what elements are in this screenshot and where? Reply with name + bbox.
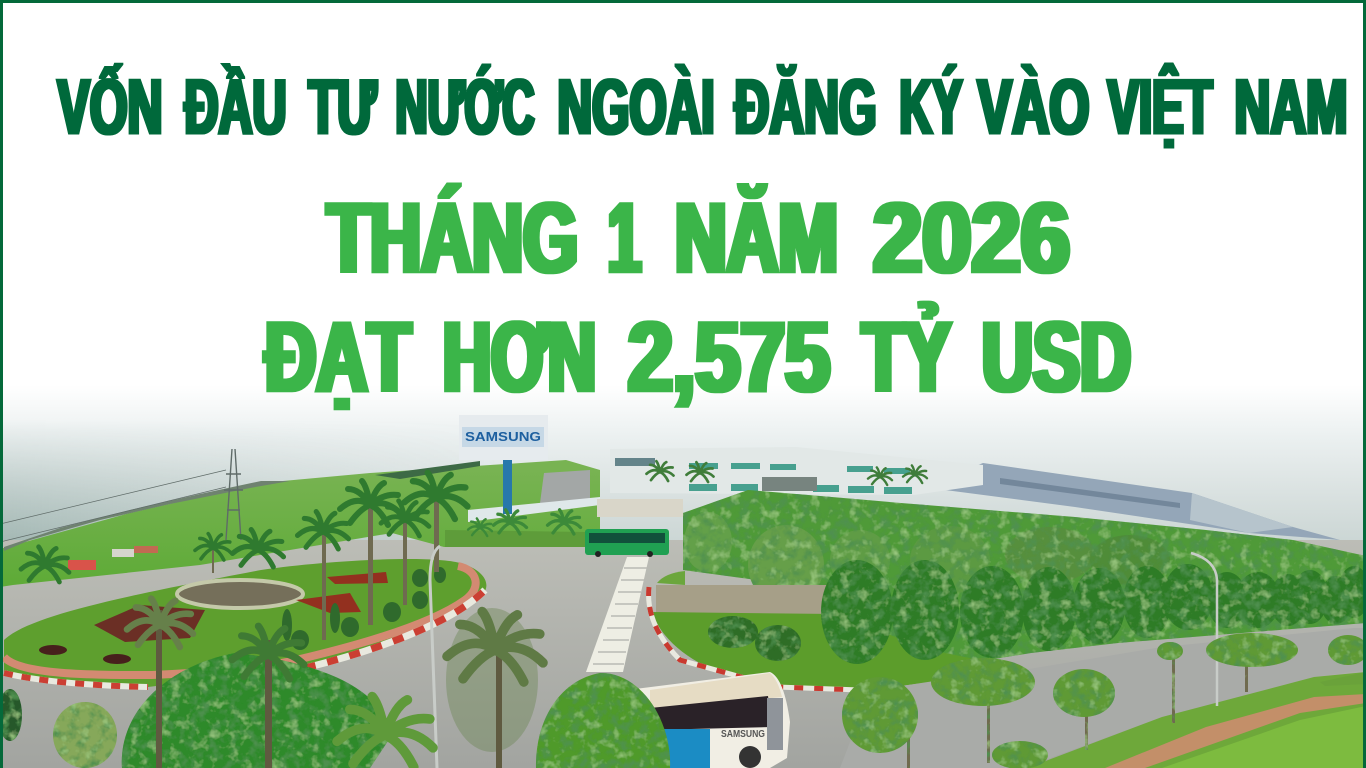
right road and verge xyxy=(840,628,1366,768)
white Samsung bus xyxy=(572,672,790,768)
billboard: Samsung xyxy=(459,415,548,514)
headline: month and amount: USD xyxy=(982,301,1131,412)
photo: industrial park panorama xyxy=(0,385,1366,768)
title line 1: VÀO xyxy=(978,62,1090,150)
headline: month and amount: 2026 xyxy=(873,182,1070,293)
inner estate road and fence xyxy=(445,470,683,547)
foreground trees left xyxy=(0,653,392,768)
title line 1: NƯỚC xyxy=(396,62,534,150)
curb: right xyxy=(649,587,860,690)
flags row xyxy=(68,546,158,570)
left sky shadow xyxy=(3,436,402,540)
title line 1 xyxy=(58,62,1348,150)
small palms behind building xyxy=(646,461,927,485)
green bus xyxy=(585,529,669,557)
title line 1: NGOÀI xyxy=(558,62,714,150)
row of dark trees xyxy=(821,560,1366,664)
fence palms xyxy=(468,510,580,536)
title line 1: VỐN xyxy=(58,62,162,150)
title line 1: VIỆT xyxy=(1108,62,1212,150)
white Samsung bus: SAMSUNG xyxy=(721,729,765,740)
foreground tree over bus xyxy=(536,673,670,768)
distant green fields xyxy=(0,460,600,587)
small lawn corner xyxy=(657,571,685,585)
factory: far building xyxy=(922,463,1340,540)
hedges xyxy=(708,616,801,661)
title line 1: KÝ xyxy=(900,62,962,150)
headline: month and amount: ĐẠT xyxy=(265,301,411,412)
street lamps xyxy=(430,546,1217,768)
title line 1: ĐĂNG xyxy=(734,62,876,150)
power pylon and wires xyxy=(0,449,243,542)
lawn under trees xyxy=(652,612,1020,690)
headline: month and amount: NĂM xyxy=(675,182,838,293)
headline: month and amount: HƠN xyxy=(443,301,596,412)
billboard: Samsung: SAMSUNG xyxy=(465,429,541,444)
headline: month and amount: 2,575 xyxy=(628,301,830,412)
stone retaining wall xyxy=(656,585,835,617)
roundabout island xyxy=(4,559,486,687)
title line 1: TƯ xyxy=(308,62,377,150)
headline: month and amount: THÁNG xyxy=(327,182,578,293)
willow and tree mass xyxy=(683,490,1366,670)
palm trees on island xyxy=(21,473,468,640)
headline: month and amount: TỶ xyxy=(862,301,951,412)
foreground palms xyxy=(127,599,543,768)
crosswalk xyxy=(586,557,649,672)
road surface xyxy=(0,540,1366,768)
roadside young trees xyxy=(842,633,1366,768)
headline: month and amount xyxy=(265,182,1131,412)
factory: main building xyxy=(610,447,983,495)
sky haze xyxy=(0,385,1366,570)
distant tree line xyxy=(375,461,480,479)
title line 1: ĐẦU xyxy=(184,62,286,150)
headline: month and amount: 1 xyxy=(608,182,641,293)
distant town strip xyxy=(4,481,290,551)
